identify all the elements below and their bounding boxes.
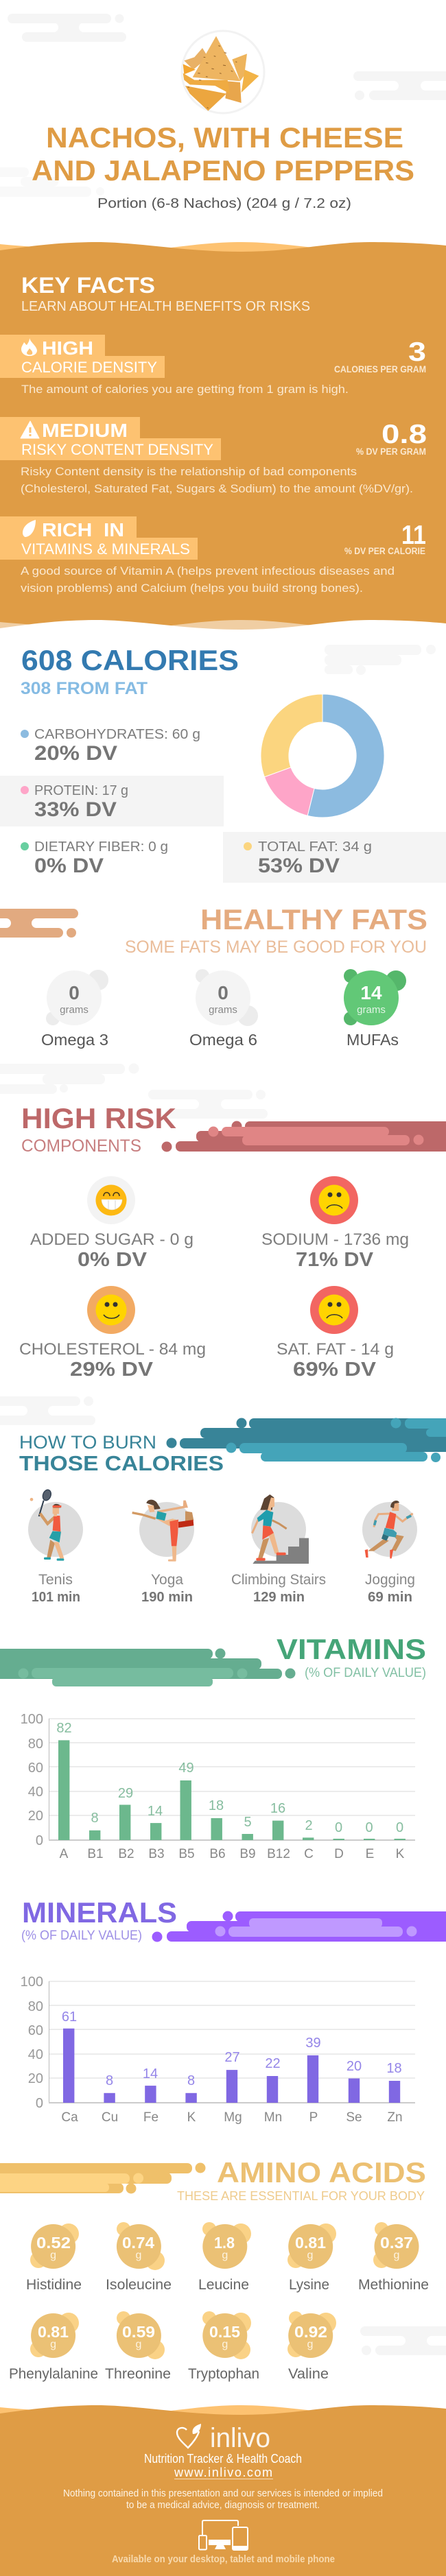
bar chart: vitamins: 80 [28,1737,43,1752]
decorative bars [162,1121,446,1152]
amino: phenylalanine [9,2313,98,2382]
fact: medium risky content density [0,417,427,495]
icon: flame [21,338,37,356]
bar chart: vitamins: B5 [178,1847,195,1861]
decorative bars [152,1911,446,1942]
activity: tennis [28,1489,83,1561]
fact: medium risky content density: Risky Content density is the relationship of bad components [21,465,357,478]
amino: tryptophan [188,2311,259,2382]
bar chart: vitamins: 8 [91,1811,99,1826]
activity: jogging [362,1501,417,1558]
healthy fats heading: HEALTHY FATS [200,903,427,935]
decorative bars [0,2163,206,2193]
fact: high calorie density: HIGH [42,337,93,359]
bar chart: vitamins: 2 [305,1818,313,1833]
bar chart: vitamins: K [396,1847,405,1861]
legend: protein [0,776,224,826]
how to burn heading: HOW TO BURN [19,1432,156,1453]
amino acids heading: AMINO ACIDS [217,2156,426,2189]
decorative bars [0,1649,295,1686]
key facts heading: KEY FACTS [21,273,155,298]
mufas: grams [357,1004,386,1016]
legend: dietary fiber [21,839,168,877]
bar chart: minerals: 0 [36,2096,43,2111]
amino: methionine [358,2222,429,2293]
activity labels: 129 min [253,1590,305,1605]
fact: high calorie density [0,335,426,396]
panel: key facts [0,242,446,639]
mufas [344,969,406,1049]
panel: footer [0,2405,446,2576]
decorative bars [166,1418,446,1462]
legend: dietary fiber: DIETARY FIBER: 0 g [34,839,168,855]
omega 3: grams [60,1004,89,1016]
legend: total fat: TOTAL FAT: 34 g [258,839,372,855]
icon: warning triangle [21,421,39,438]
bar chart: minerals: K [187,2110,196,2125]
activity labels: Climbing Stairs [231,1572,326,1588]
bar chart: vitamins: 0 [335,1820,342,1835]
logo: inlivo: inlivo [210,2423,270,2453]
omega 6 [189,969,258,1049]
omega 3: 0 [69,982,80,1003]
bar chart: minerals: Mg [224,2110,242,2125]
title: AND JALAPENO PEPPERS [32,154,414,187]
bar chart: minerals: Zn [387,2110,403,2125]
fact: medium risky content density: % DV PER GRAM [356,446,426,457]
activity labels: Tenis [38,1572,73,1588]
amino: methionine: 0.37 [380,2234,413,2252]
fact: high calorie density: 3 [408,337,426,367]
bar chart: minerals: 18 [386,2061,402,2076]
bar chart: minerals: Ca [61,2110,78,2125]
cholesterol: 29% DV [70,1359,154,1381]
amino: valine: g [307,2339,313,2350]
amino: isoleucine: g [136,2250,141,2261]
fact: rich in vitamins and minerals: 11 [401,521,426,550]
bar chart: minerals: Se [346,2110,362,2125]
sodium: 71% DV [296,1249,374,1271]
bar chart: vitamins: 49 [178,1761,194,1776]
bar chart: minerals: 39 [305,2036,321,2051]
bar chart: vitamins [21,1712,415,1861]
bar chart: vitamins: 100 [21,1712,43,1727]
amino: threonine: 0.59 [122,2323,155,2341]
panel: minerals [21,1896,446,2125]
amino: leucine: 1.8 [214,2234,235,2252]
amino: threonine [105,2311,171,2382]
amino: leucine [198,2222,251,2293]
cholesterol [19,1286,206,1381]
fact: high calorie density: CALORIE DENSITY [21,359,157,376]
activity labels: 190 min [141,1590,193,1605]
legend: total fat: 53% DV [258,855,340,877]
panel: healthy fats [0,903,427,1049]
added sugar: 0% DV [78,1249,148,1271]
website link: www.inlivo.com [174,2466,272,2479]
amino: leucine: g [222,2250,228,2261]
fact: medium risky content density: (Cholesterol, Saturated Fat, Sugars & Sodium) to the amount (%DV/gr). [21,482,413,495]
donut chart [261,694,384,818]
amino: valine [287,2311,336,2382]
bar chart: vitamins: 60 [28,1761,43,1776]
legend: total fat [223,832,446,883]
cholesterol: CHOLESTEROL - 84 mg [19,1340,206,1359]
fact: medium risky content density: 0.8 [382,420,427,449]
bar chart: minerals [21,1975,415,2125]
fact: rich in vitamins and minerals: RICH IN [42,519,124,540]
logo: inlivo [177,2423,270,2453]
activity labels: 69 min [368,1590,412,1605]
fact: rich in vitamins and minerals: % DV PER CALORIE [344,546,425,556]
activity: yoga [132,1500,194,1562]
panel: how to burn those calories [19,1418,446,1605]
availability note: Available on your desktop, tablet and mobile phone [112,2553,335,2565]
omega 3 [41,970,108,1049]
panel: amino acids [0,2156,429,2382]
bar chart: minerals: 14 [143,2066,158,2082]
bar chart: minerals: 27 [224,2050,240,2065]
activity labels: 101 min [32,1590,80,1605]
key facts subheading: LEARN ABOUT HEALTH BENEFITS OR RISKS [21,299,310,314]
omega 6: 0 [218,982,228,1003]
amino: lysine: 0.81 [295,2234,326,2252]
components subheading: COMPONENTS [21,1136,141,1156]
amino: histidine: 0.52 [36,2234,71,2252]
vitamins subheading: (% OF DAILY VALUE) [305,1666,426,1680]
omega 6: grams [209,1004,237,1016]
fact: rich in vitamins and minerals: A good source of Vitamin A (helps prevent infectious diseases and [21,564,395,577]
bar chart: vitamins: 18 [209,1798,224,1813]
amino: methionine: g [394,2250,399,2261]
calories heading: 608 CALORIES [21,644,239,676]
bar chart: minerals: Fe [143,2110,159,2125]
healthy fats subheading: SOME FATS MAY BE GOOD FOR YOU [125,938,427,957]
added sugar: ADDED SUGAR - 0 g [30,1230,193,1249]
added sugar [30,1176,193,1271]
food photo: nachos [182,31,264,113]
fact: rich in vitamins and minerals: VITAMINS & MINERALS [21,540,190,558]
amino: threonine: Threonine [105,2366,171,2382]
high risk heading: HIGH RISK [21,1102,176,1134]
amino: phenylalanine: 0.81 [38,2323,69,2341]
disclaimer: to be a medical advice, diagnosis or treatment. [126,2499,320,2511]
legend: carbohydrates: CARBOHYDRATES: 60 g [34,727,200,742]
icon: leaf [23,520,36,537]
amino: phenylalanine: g [50,2339,56,2350]
amino: tryptophan: 0.15 [209,2323,240,2341]
mufas: 14 [360,982,382,1003]
omega 3: Omega 3 [41,1031,108,1049]
bar chart: vitamins: C [304,1847,314,1861]
fact: rich in vitamins and minerals: vision problems) and Calcium (helps you build strong bones). [21,582,363,595]
bar chart: vitamins: B6 [209,1847,226,1861]
sodium [261,1176,409,1271]
bar chart: minerals: 100 [21,1975,43,1990]
bar chart: vitamins: B9 [239,1847,256,1861]
fact: high calorie density: CALORIES PER GRAM [334,364,426,374]
bar chart: vitamins: B3 [148,1847,165,1861]
bar chart: minerals: Cu [102,2110,118,2125]
bar chart: minerals: 20 [347,2059,362,2074]
bar chart: minerals: 20 [28,2071,43,2086]
amino: histidine: g [50,2250,56,2261]
bar chart: vitamins: 82 [56,1721,72,1736]
bar chart: minerals: 61 [62,2009,77,2025]
those calories heading: THOSE CALORIES [19,1451,224,1475]
amino: lysine: g [307,2250,313,2261]
bar chart: vitamins: 16 [270,1801,285,1816]
portion subtitle: Portion (6-8 Nachos) (204 g / 7.2 oz) [97,196,351,211]
minerals heading: MINERALS [22,1896,177,1929]
saturated fat: SAT. FAT - 14 g [277,1340,394,1359]
fact: rich in vitamins and minerals [0,516,426,595]
activity labels: Jogging [365,1572,415,1588]
icon: devices [199,2520,248,2550]
panel: vitamins [0,1633,426,1861]
legend: dietary fiber: 0% DV [34,855,104,877]
vitamins heading: VITAMINS [277,1633,426,1665]
amino: tryptophan: Tryptophan [188,2366,259,2382]
activity labels: Yoga [151,1572,183,1588]
amino acids subheading: THESE ARE ESSENTIAL FOR YOUR BODY [177,2189,425,2203]
amino: valine: 0.92 [294,2323,327,2341]
legend: protein: PROTEIN: 17 g [34,783,128,798]
amino: isoleucine [106,2222,172,2293]
amino: tryptophan: g [222,2339,228,2350]
bar chart: vitamins: 40 [28,1785,43,1800]
amino: valine: Valine [288,2366,329,2382]
bar chart: vitamins: 0 [396,1820,403,1835]
title [32,121,414,187]
amino: isoleucine: Isoleucine [106,2277,172,2293]
bar chart: vitamins: E [366,1847,374,1861]
amino: isoleucine: 0.74 [122,2234,154,2252]
panel: high risk components [19,1102,446,1381]
legend: carbohydrates: 20% DV [34,742,117,765]
disclaimer: Nothing contained in this presentation and our services is intended or implied [63,2488,383,2499]
bar chart: minerals: 60 [28,2023,43,2038]
disclaimer [63,2488,383,2511]
amino: histidine: Histidine [26,2277,82,2293]
bar chart: vitamins: 20 [28,1809,43,1824]
legend: carbohydrates [21,727,200,765]
minerals subheading: (% OF DAILY VALUE) [21,1929,142,1943]
fact: medium risky content density: RISKY CONTENT DENSITY [21,441,213,458]
saturated fat: 69% DV [293,1359,377,1381]
decorative bars [0,909,78,938]
saturated fat [277,1286,394,1381]
bar chart: vitamins: B1 [87,1847,104,1861]
calories from fat: 308 FROM FAT [21,679,148,698]
amino: lysine [287,2223,336,2293]
amino: lysine: Lysine [289,2277,329,2293]
bar chart: vitamins: A [60,1847,69,1861]
bar chart: vitamins: 29 [118,1786,133,1801]
bar chart: vitamins: B2 [118,1847,134,1861]
bar chart: vitamins: 5 [244,1815,252,1830]
bar chart: vitamins: 14 [148,1804,163,1819]
amino: leucine: Leucine [198,2277,249,2293]
bar chart: minerals: 40 [28,2047,43,2062]
activity labels [32,1572,415,1605]
bar chart: vitamins: D [334,1847,344,1861]
omega 6: Omega 6 [189,1031,257,1049]
tagline: Nutrition Tracker & Health Coach [144,2452,302,2466]
bar chart: minerals: 22 [265,2056,281,2071]
bar chart: vitamins: 0 [365,1820,373,1835]
bar chart: minerals: 8 [106,2073,113,2088]
bar chart: minerals: Mn [264,2110,282,2125]
bar chart: minerals: 8 [187,2073,195,2088]
amino: threonine: g [136,2339,141,2350]
bar chart: minerals: P [309,2110,318,2125]
amino: histidine [26,2223,82,2293]
amino: phenylalanine: Phenylalanine [9,2366,98,2382]
legend: protein: 33% DV [34,798,117,821]
mufas: MUFAs [347,1031,399,1049]
fact: high calorie density: The amount of calories you are getting from 1 gram is high. [21,383,349,396]
sodium: SODIUM - 1736 mg [261,1230,409,1249]
bar chart: vitamins: B12 [267,1847,290,1861]
fact: medium risky content density: MEDIUM [42,420,128,441]
panel: calories [0,644,446,883]
amino: methionine: Methionine [358,2277,429,2293]
bar chart: minerals: 80 [28,1999,43,2014]
bar chart: vitamins: 0 [36,1833,43,1848]
activity: climbing stairs [251,1494,309,1564]
title: NACHOS, WITH CHEESE [46,121,403,154]
